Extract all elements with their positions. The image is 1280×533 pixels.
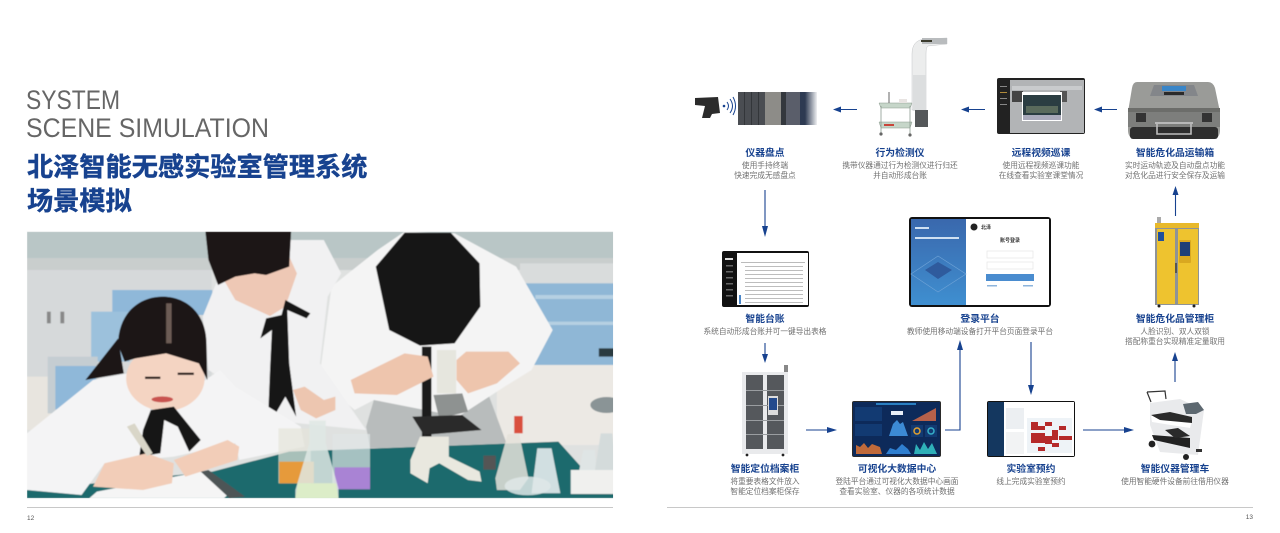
node: hazardous goods cabinet (1125, 217, 1225, 346)
icon: transport case (1128, 82, 1220, 139)
icon: ledger screen (722, 251, 809, 307)
node: big data dashboard (835, 401, 959, 496)
node: smart ledger: 系统自动形成台账并可一键导出表格 (703, 326, 827, 336)
chinese heading (27, 152, 367, 216)
node: remote video inspection: 使用远程视频巡课功能 (1003, 160, 1080, 170)
node: big data dashboard: 可视化大数据中心 (858, 462, 936, 475)
node: instrument inventory: 仪器盘点 (745, 146, 785, 159)
chinese heading: 北泽智能无感实验室管理系统 (27, 152, 367, 182)
english title: SYSTEM (26, 85, 120, 115)
arrow: inventory to ledger (762, 190, 768, 237)
arrow: ledger to file cabinet (762, 343, 768, 363)
icon: dashboard screen (852, 401, 941, 457)
node: hazardous goods transport case: 实时运动轨迹及自动盘点功能 (1125, 160, 1225, 170)
icon: reservation screen (987, 401, 1075, 457)
icon: file cabinet (742, 365, 788, 456)
icon: login screen: 账号登录 (1000, 237, 1020, 244)
node: instrument inventory: 使用手持终端 (742, 160, 788, 170)
node: smart instrument cart: 智能仪器管理车 (1141, 462, 1209, 475)
english title (26, 85, 269, 143)
node: behaviour detector: 并自动形成台账 (873, 170, 927, 180)
arrow: dashboard to login platform (945, 340, 963, 430)
right footer rule and page number: 13 (1246, 514, 1253, 521)
icon: detector column and trolley (879, 38, 947, 137)
node: login platform: 登录平台 (960, 312, 1000, 325)
node: remote video inspection (997, 78, 1085, 180)
node: remote video inspection: 远程视频巡课 (1012, 146, 1071, 159)
left footer rule and page number: 12 (27, 515, 35, 522)
icon: instrument cart (1147, 391, 1204, 460)
arrow: transport case to video inspection (1094, 106, 1117, 112)
node: smart ledger (703, 251, 827, 336)
photo: students in the laboratory (27, 232, 623, 498)
arrow: cart to hazardous cabinet (1172, 352, 1178, 382)
node: hazardous goods transport case (1125, 82, 1225, 180)
english title: SCENE SIMULATION (26, 113, 269, 143)
node: smart positioning file cabinet: 智能定位档案柜保存 (730, 486, 800, 496)
node: login platform: 教师使用移动端设备打开平台页面登录平台 (907, 326, 1053, 336)
icon: login screen: 北泽 (981, 224, 991, 231)
node: behaviour detector: 行为检测仪 (876, 146, 925, 159)
node: smart positioning file cabinet: 将重要表格文件放入 (730, 476, 800, 486)
node: instrument inventory (695, 92, 818, 180)
node: big data dashboard: 登陆平台通过可视化大数据中心画面 (835, 476, 959, 486)
icon: storage shelves (738, 92, 818, 125)
arrow: reservation to cart (1083, 427, 1134, 433)
arrow: video inspection to behaviour detector (961, 106, 985, 112)
icon: video inspection screen (997, 78, 1085, 134)
node: smart instrument cart (1121, 391, 1229, 486)
node: hazardous goods cabinet: 搭配称重台实现精准定量取用 (1125, 336, 1225, 346)
node: behaviour detector: 携带仪器通过行为检测仪进行归还 (842, 160, 958, 170)
icon: login screen (909, 217, 1051, 307)
node: lab reservation (987, 401, 1075, 486)
node: big data dashboard: 查看实验室、仪器的各项统计数据 (839, 486, 955, 496)
node: smart positioning file cabinet (730, 365, 800, 496)
arrow: hazardous cabinet to transport case (1172, 186, 1178, 216)
node: instrument inventory: 快速完成无感盘点 (734, 170, 796, 180)
node: hazardous goods cabinet: 人脸识别、双人双锁 (1140, 326, 1210, 336)
icon: handheld scanner with signal (695, 97, 736, 118)
node: hazardous goods transport case: 对危化品进行安全保存及运输 (1125, 170, 1225, 180)
node: smart positioning file cabinet: 智能定位档案柜 (731, 462, 799, 475)
chinese heading: 场景模拟 (27, 186, 132, 216)
node: hazardous goods transport case: 智能危化品运输箱 (1136, 146, 1214, 159)
arrow: file cabinet to dashboard (806, 427, 837, 433)
arrow: login platform to reservation (1028, 342, 1034, 395)
node: remote video inspection: 在线查看实验室课堂情况 (999, 170, 1084, 180)
node: smart ledger: 智能台账 (745, 312, 785, 325)
node: login platform (907, 217, 1053, 336)
node: lab reservation: 实验室预约 (1007, 462, 1056, 475)
node: smart instrument cart: 使用智能硬件设备前往借用仪器 (1121, 476, 1229, 486)
node: behaviour detector (842, 38, 958, 180)
node: hazardous goods cabinet: 智能危化品管理柜 (1136, 312, 1214, 325)
arrow: behaviour detector to inventory (833, 106, 857, 112)
node: lab reservation: 线上完成实验室预约 (996, 476, 1066, 486)
icon: yellow cabinet (1155, 217, 1199, 308)
